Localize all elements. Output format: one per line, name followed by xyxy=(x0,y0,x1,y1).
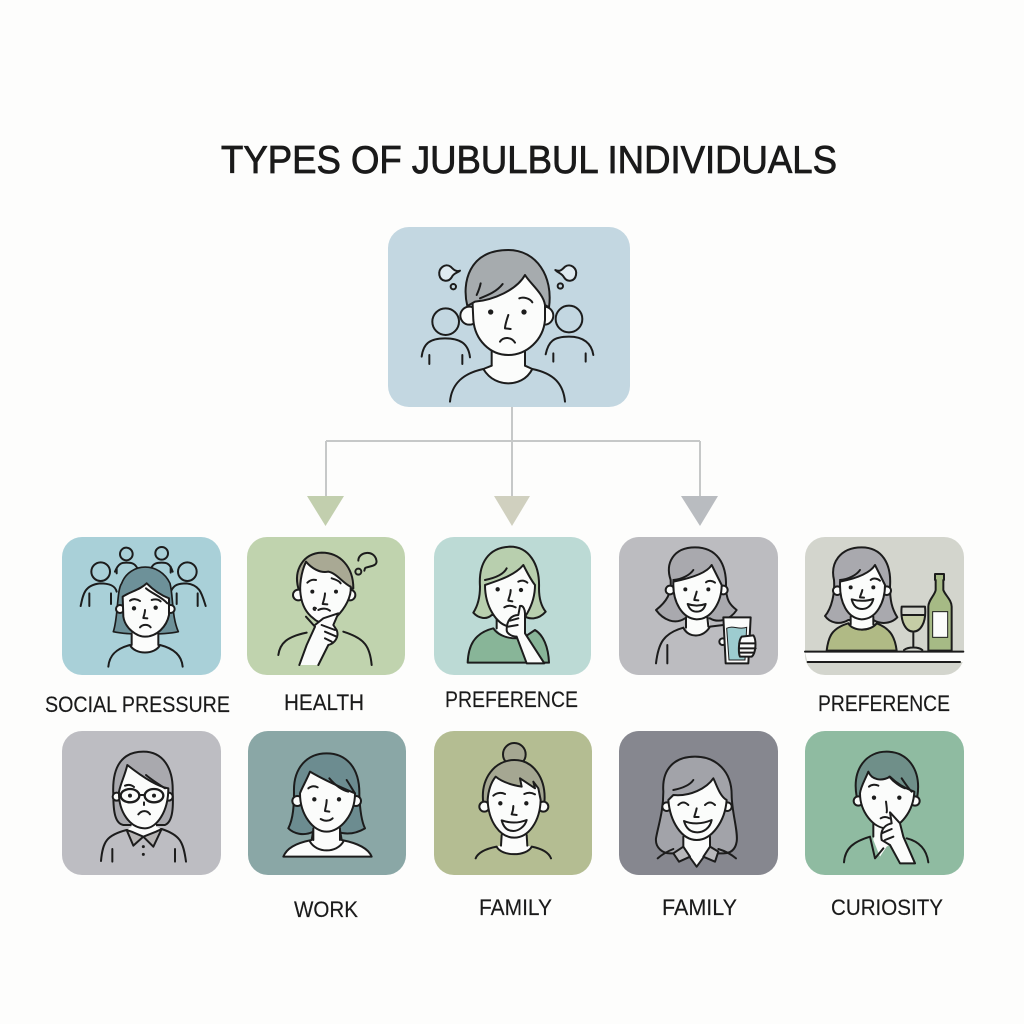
label: SOCIAL PRESSURE xyxy=(45,692,230,717)
icon: woman touching chin xyxy=(468,547,549,663)
tile xyxy=(62,731,221,875)
icon: smiling woman xyxy=(283,753,372,857)
arrow: center xyxy=(494,496,530,526)
icon: thinking person with question mark xyxy=(278,553,377,665)
label: CURIOSITY xyxy=(831,895,943,920)
tile xyxy=(805,731,964,875)
main tile xyxy=(388,227,630,407)
panel: family one xyxy=(434,731,592,920)
icon: woman with hair bun xyxy=(476,743,551,858)
tile xyxy=(247,537,405,675)
label: WORK xyxy=(294,897,358,922)
tile xyxy=(805,537,964,675)
tile xyxy=(248,731,406,875)
icon: person with crowd behind xyxy=(81,547,206,667)
label: HEALTH xyxy=(284,690,364,715)
icon: woman holding a glass of water xyxy=(656,547,756,663)
icon: person with glasses xyxy=(101,752,186,862)
label: FAMILY xyxy=(479,895,552,920)
connector arrows xyxy=(307,407,718,526)
tile xyxy=(434,537,591,675)
label: PREFERENCE xyxy=(818,691,950,716)
panel: water drinker xyxy=(619,537,778,675)
icon: person touching nose xyxy=(844,752,928,863)
tile xyxy=(62,537,221,675)
icon: worried person with peers and thought bubbles xyxy=(422,250,593,402)
panel: social pressure xyxy=(45,537,230,717)
icon: laughing woman xyxy=(656,757,737,867)
panel: preference two xyxy=(805,537,964,716)
icon: woman with wine glass and bottle at a table xyxy=(805,547,964,662)
label: PREFERENCE xyxy=(445,687,578,712)
panel: family two xyxy=(619,731,778,920)
panel: curiosity xyxy=(805,731,964,920)
tile xyxy=(434,731,592,875)
arrow: left xyxy=(307,496,344,526)
panel: work xyxy=(248,731,406,922)
arrow: right xyxy=(681,496,718,526)
panel: main person xyxy=(388,227,630,407)
panel: preference one xyxy=(434,537,591,712)
title: TYPES OF JUBULBUL INDIVIDUALS xyxy=(221,139,837,182)
label: FAMILY xyxy=(662,895,737,920)
panel: frowning person with glasses xyxy=(62,731,221,875)
tile xyxy=(619,537,778,675)
tile xyxy=(619,731,778,875)
panel: health xyxy=(247,537,405,715)
